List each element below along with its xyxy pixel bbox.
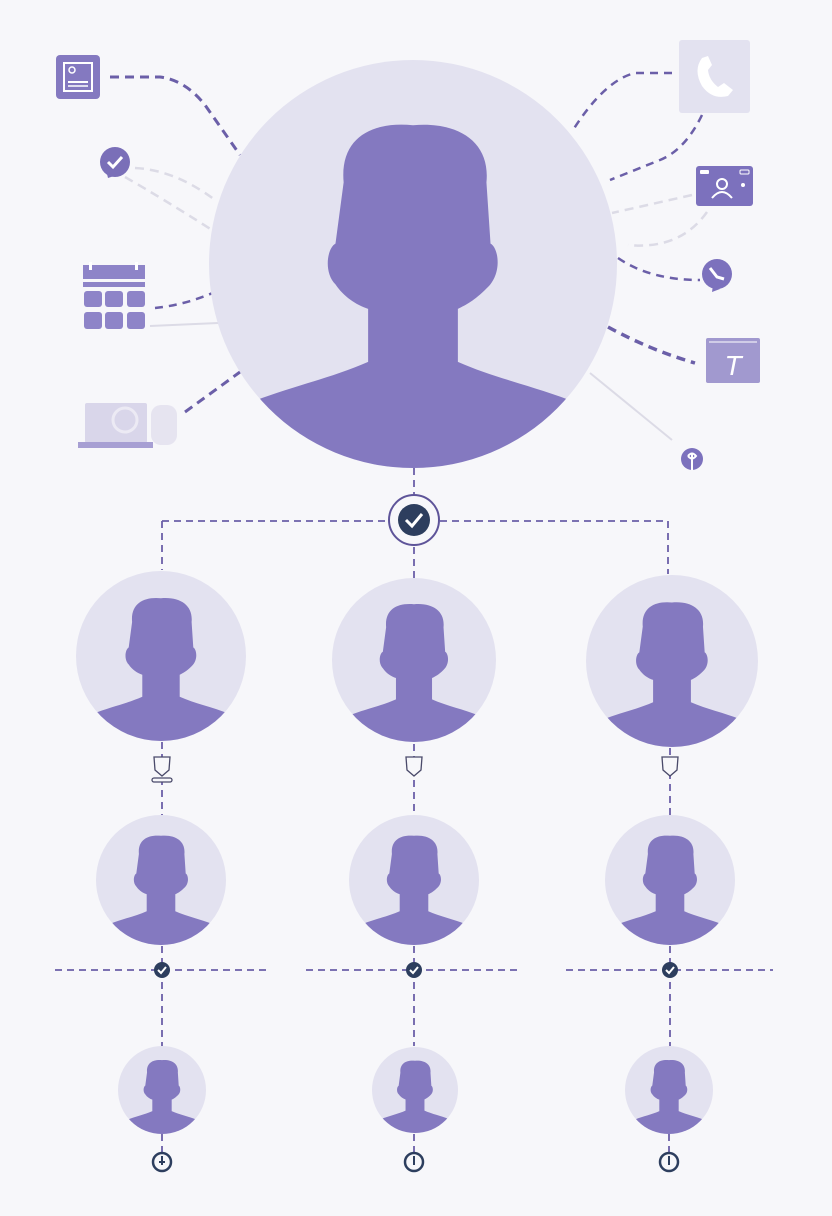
row 2 profiles xyxy=(76,571,758,747)
icon: calendar xyxy=(83,262,145,329)
tree connectors xyxy=(55,468,773,1152)
icon: laptop xyxy=(78,403,177,448)
connectors: top hub xyxy=(110,73,707,440)
icon: pin xyxy=(681,448,703,470)
icon: clock bubble xyxy=(702,259,732,292)
bottom icons xyxy=(153,1153,678,1171)
main profile circle xyxy=(209,60,617,468)
icon: text box xyxy=(706,338,760,383)
icon: document xyxy=(56,55,100,99)
small checks xyxy=(154,962,678,978)
icon: contact card xyxy=(696,166,753,206)
icon: check bubble xyxy=(100,147,130,178)
lock icons xyxy=(152,757,678,782)
check node xyxy=(389,495,439,545)
icon: phone xyxy=(679,40,750,113)
row 3 profiles xyxy=(96,815,735,945)
row 4 profiles xyxy=(118,1046,713,1134)
icon: text box: T xyxy=(724,350,743,381)
